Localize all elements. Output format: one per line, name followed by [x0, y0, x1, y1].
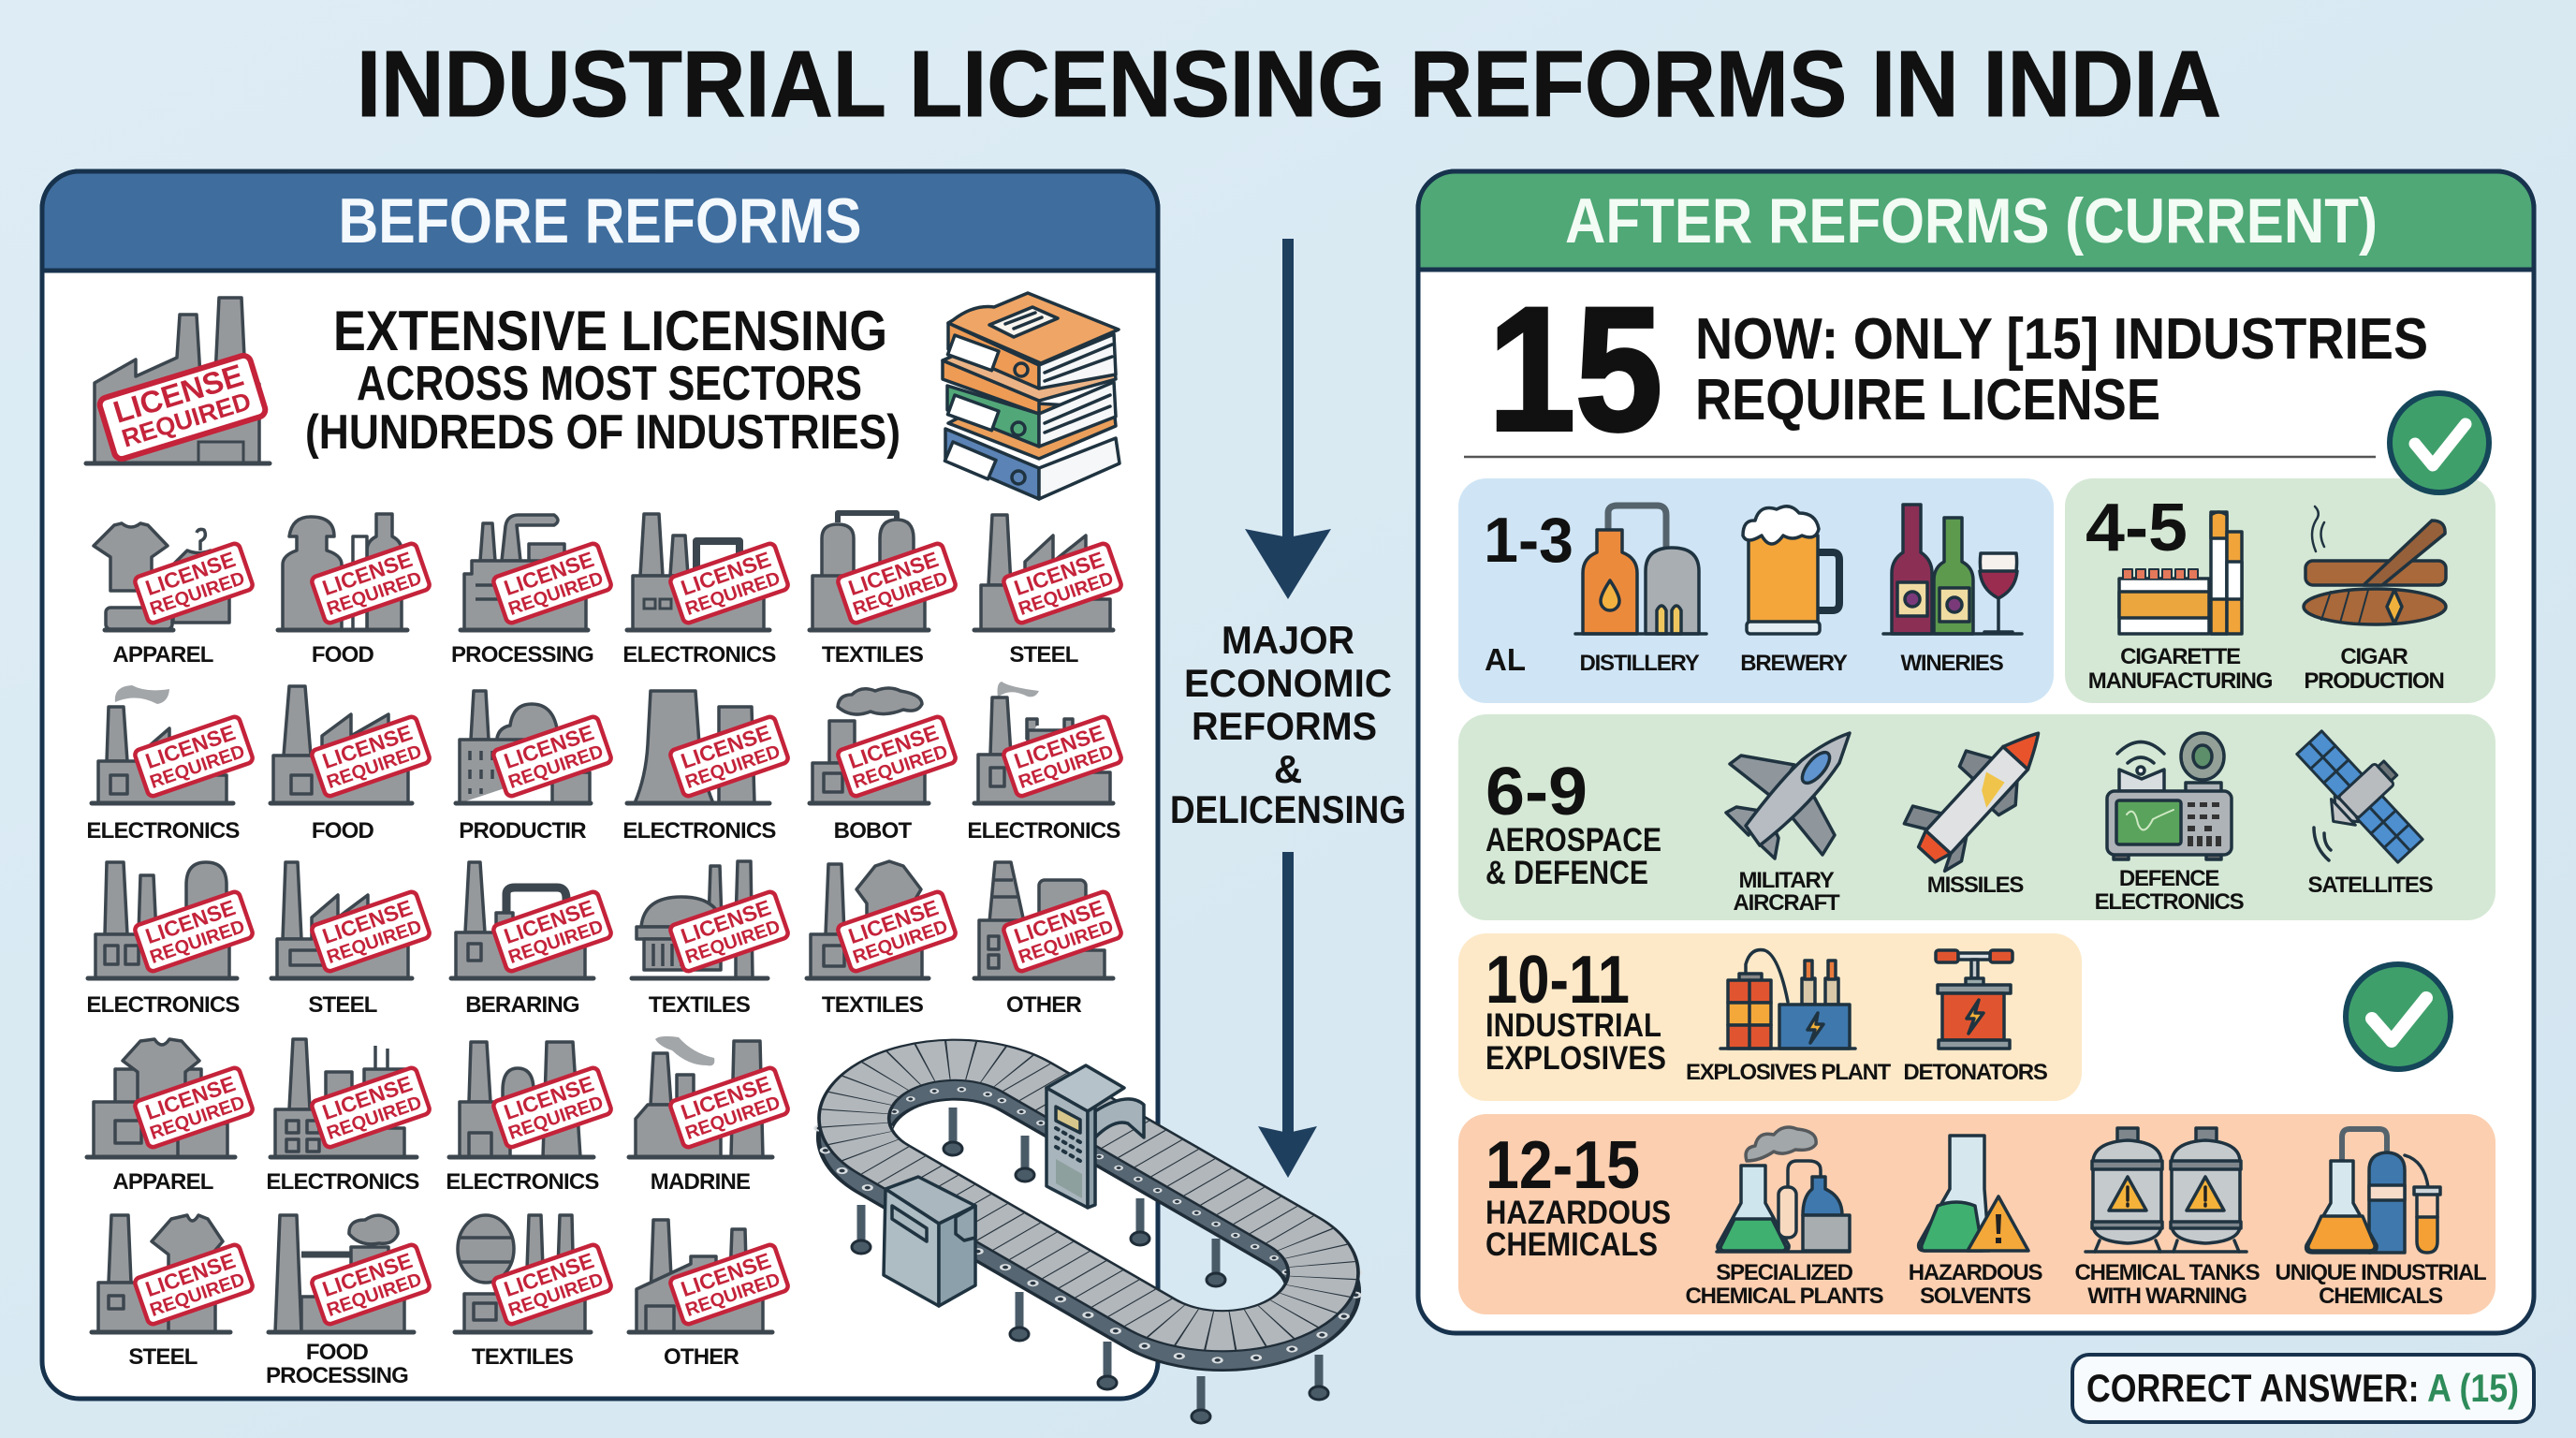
label: cigar production [2304, 644, 2444, 694]
label: detonators: DETONATORS [1903, 1060, 2048, 1085]
label: cigar production: PRODUCTION [2304, 668, 2444, 694]
panel header: after reforms: AFTER REFORMS (CURRENT) [1565, 185, 2378, 257]
grid cell: madrine: LICENSE [678, 1071, 774, 1124]
label: MADRINE [651, 1169, 751, 1195]
label: ELECTRONICS [967, 818, 1120, 844]
grid cell: food processing: REQUIRED [324, 1269, 424, 1321]
centre label: major economic reforms: MAJOR [1222, 618, 1354, 662]
grid cell: berarng: REQUIRED [505, 917, 606, 968]
card: industrial explosives 10-11: 10-11 [1486, 943, 1630, 1018]
card: alcohol 1-3 [1458, 478, 2054, 703]
grid cell: productir [456, 691, 612, 844]
grid cell: textiles sphere [455, 1215, 612, 1370]
label: hazardous solvents [1909, 1260, 2042, 1309]
grid cell: food row 2 [271, 686, 431, 844]
icon: wineries [1883, 505, 2022, 634]
card: hazardous chemicals 12-15 [1458, 1114, 2496, 1314]
label: wineries: WINERIES [1900, 651, 2004, 676]
icon: cigars [2304, 506, 2446, 624]
answer box: CORRECT ANSWER: A (15) [2086, 1366, 2519, 1410]
grid cell: productir: LICENSE [501, 720, 597, 773]
label: OTHER [1006, 992, 1081, 1018]
centre label: major economic reforms [1170, 618, 1406, 831]
big number 15: 15 [1488, 271, 1662, 467]
label: military aircraft: MILITARY [1738, 868, 1835, 893]
grid cell: steel row 3: LICENSE [319, 895, 416, 948]
grid cell: apparel: LICENSE [142, 547, 239, 600]
centre label: major economic reforms: REFORMS [1192, 704, 1377, 748]
card: alcohol 1-3: AL [1485, 642, 1526, 677]
label: TEXTILES [822, 642, 924, 668]
panel header: before reforms [42, 171, 1158, 271]
label: satellites: SATELLITES [2308, 873, 2434, 898]
grid cell: steel row 3: REQUIRED [324, 917, 424, 968]
grid cell: electronics [622, 514, 789, 668]
grid cell: food processing: LICENSE [319, 1248, 416, 1301]
subheading: extensive licensing: EXTENSIVE LICENSING [333, 300, 887, 362]
grid cell: bobot: REQUIRED [850, 741, 950, 793]
grid cell: processing: LICENSE [501, 547, 597, 600]
icon: satellite [2283, 714, 2441, 875]
card: tobacco 4-5: 4-5 [2086, 491, 2188, 565]
grid cell: bobot [810, 688, 957, 844]
grid cell: electronics: REQUIRED [682, 568, 783, 620]
grid cell: other: LICENSE [1011, 895, 1107, 948]
grid cell: other: REQUIRED [1016, 917, 1116, 968]
grid cell: food row 2: LICENSE [319, 720, 416, 773]
check badge top [2390, 393, 2489, 492]
headline: only 15 industries [1695, 307, 2428, 433]
label: defence electronics: ELECTRONICS [2095, 889, 2245, 915]
panel: before reforms [42, 171, 1158, 1399]
icon: large factory with license stamp: REQUIRED [119, 387, 255, 453]
grid cell: electronics row 2: REQUIRED [147, 741, 247, 793]
icon: detonator [1936, 950, 2012, 1049]
label: TEXTILES [649, 992, 751, 1018]
label: military aircraft: AIRCRAFT [1733, 890, 1840, 916]
grid cell: textiles shirt: LICENSE [845, 895, 942, 948]
label: PROCESSING [451, 642, 593, 668]
card: industrial explosives 10-11 [1458, 933, 2082, 1101]
label: cigarette manufacturing: CIGARETTE [2120, 644, 2241, 669]
label: ELECTRONICS [446, 1169, 599, 1195]
grid cell: electronics row 4 [266, 1039, 431, 1195]
label: BERARING [465, 992, 579, 1018]
grid cell: processing [451, 515, 612, 668]
subheading: extensive licensing: ACROSS MOST SECTORS [357, 357, 862, 411]
label: specialized chemical plants [1686, 1260, 1884, 1309]
grid cell: textiles [810, 513, 957, 668]
label: chemical tanks with warning [2075, 1260, 2261, 1309]
label: ELECTRONICS [266, 1169, 419, 1195]
scanner machine on belt [1046, 1065, 1144, 1208]
grid cell: berarng: LICENSE [501, 895, 597, 948]
grid cell: textiles sphere: LICENSE [501, 1248, 597, 1301]
grid cell: other row 5: REQUIRED [682, 1269, 783, 1321]
card: industrial explosives 10-11: EXPLOSIVES [1486, 1040, 1666, 1077]
label: hazardous solvents: HAZARDOUS [1909, 1260, 2042, 1285]
panel header: after reforms [1418, 171, 2534, 270]
headline: only 15 industries: REQUIRE LICENSE [1695, 368, 2160, 433]
grid cell: electronics with smoke: LICENSE [1011, 720, 1107, 773]
grid cell: apparel [94, 523, 254, 668]
grid cell: electronics tanks: REQUIRED [505, 1093, 606, 1144]
icon: brewery [1743, 506, 1839, 634]
grid cell: steel [974, 515, 1122, 668]
grid cell: textiles dome [632, 861, 789, 1018]
centre label: major economic reforms: & [1274, 747, 1302, 791]
icon: unique industrial chemicals [2306, 1129, 2440, 1253]
grid cell: apparel row 4 [87, 1039, 254, 1195]
label: PRODUCTIR [459, 818, 586, 844]
label: unique industrial chemicals [2276, 1260, 2486, 1309]
subheading: extensive licensing: (HUNDREDS OF INDUSTRIES) [305, 405, 900, 460]
icon: distillery [1575, 506, 1706, 634]
card: hazardous chemicals 12-15: HAZARDOUS [1486, 1195, 1671, 1231]
grid cell: textiles shirt: REQUIRED [850, 917, 950, 968]
label: APPAREL [112, 1169, 213, 1195]
grid cell: madrine: REQUIRED [682, 1093, 783, 1144]
grid cell: apparel: REQUIRED [147, 568, 247, 620]
icon: specialized chemical plants [1717, 1127, 1850, 1252]
label: BOBOT [834, 818, 912, 844]
card: aerospace and defence 6-9: AEROSPACE [1486, 822, 1661, 858]
grid cell: electronics row 3: LICENSE [142, 895, 239, 948]
panel header: before reforms: BEFORE REFORMS [339, 185, 861, 257]
label: FOOD [306, 1340, 369, 1365]
grid cell: textiles sphere: REQUIRED [505, 1269, 606, 1321]
grid cell: food row 2: REQUIRED [324, 741, 424, 793]
grid cell: cooling tower: REQUIRED [682, 741, 783, 793]
label: distillery: DISTILLERY [1579, 651, 1700, 676]
grid cell: electronics tanks [446, 1042, 612, 1195]
grid cell: other row 5: LICENSE [678, 1248, 774, 1301]
grid cell: bobot: LICENSE [845, 720, 942, 773]
grid cell: productir: REQUIRED [505, 741, 606, 793]
grid cell: food: LICENSE [319, 547, 416, 600]
label: chemical tanks with warning: WITH WARNING [2087, 1284, 2247, 1309]
label: brewery: BREWERY [1740, 651, 1848, 676]
grid cell: apparel row 4: LICENSE [142, 1071, 239, 1124]
icon: missile [1895, 704, 2062, 876]
card: hazardous chemicals 12-15: CHEMICALS [1486, 1226, 1658, 1263]
grid cell: berarng [451, 862, 612, 1018]
subheading: extensive licensing [305, 300, 900, 460]
grid cell: electronics: LICENSE [678, 547, 774, 600]
grid cell: textiles: LICENSE [845, 547, 942, 600]
grid cell: electronics with smoke: REQUIRED [1016, 741, 1116, 793]
arrow: bottom [1258, 852, 1317, 1178]
grid cell: food [278, 514, 431, 668]
icon: cigarette pack [2119, 512, 2242, 634]
card: alcohol 1-3: 1-3 [1484, 505, 1573, 576]
label: unique industrial chemicals: CHEMICALS [2319, 1284, 2443, 1309]
label: OTHER [664, 1344, 739, 1370]
grid cell: other [974, 862, 1122, 1018]
icon: explosives plant [1720, 950, 1855, 1049]
grid cell: food processing [266, 1215, 431, 1388]
label: defence electronics: DEFENCE [2119, 866, 2219, 891]
grid cell: steel row 5: REQUIRED [147, 1269, 247, 1321]
label: ELECTRONICS [622, 642, 776, 668]
label: unique industrial chemicals: UNIQUE INDUSTRIAL [2276, 1260, 2486, 1285]
headline: only 15 industries: NOW: ONLY [15] INDUSTRIES [1695, 307, 2428, 372]
grid cell: electronics row 3 [86, 862, 254, 1018]
label: ELECTRONICS [622, 818, 776, 844]
label: cigarette manufacturing: MANUFACTURING [2088, 668, 2273, 694]
icon: large factory with license stamp: LICENSE [110, 358, 247, 430]
label: defence electronics [2095, 866, 2245, 915]
label: STEEL [1009, 642, 1078, 668]
grid cell: steel: LICENSE [1011, 547, 1107, 600]
label: FOOD [312, 642, 374, 668]
answer box [2072, 1355, 2534, 1422]
label: FOOD [312, 818, 374, 844]
grid cell: electronics row 2: LICENSE [142, 720, 239, 773]
grid cell: electronics row 4: LICENSE [319, 1071, 416, 1124]
grid cell: food: REQUIRED [324, 568, 424, 620]
label: cigarette manufacturing [2088, 644, 2273, 694]
grid cell: steel row 5 [92, 1215, 254, 1370]
icon: hazardous solvents [1919, 1136, 2028, 1251]
grid cell: electronics with smoke [967, 682, 1122, 844]
grid cell: textiles dome: REQUIRED [682, 917, 783, 968]
panel: after reforms [1418, 171, 2534, 1333]
label: PROCESSING [266, 1363, 408, 1388]
grid cell: textiles shirt [807, 861, 957, 1018]
icon: large factory with license stamp [86, 298, 270, 463]
card: industrial explosives 10-11: INDUSTRIAL [1486, 1007, 1661, 1044]
card: aerospace and defence 6-9 [1458, 704, 2496, 920]
label [266, 1340, 408, 1388]
label: military aircraft [1733, 868, 1840, 916]
label: TEXTILES [472, 1344, 574, 1370]
label: APPAREL [112, 642, 213, 668]
label: STEEL [308, 992, 377, 1018]
grid cell: electronics tanks: LICENSE [501, 1071, 597, 1124]
grid cell: other row 5 [629, 1220, 789, 1370]
label: specialized chemical plants: CHEMICAL PLANTS [1686, 1284, 1884, 1309]
label: STEEL [128, 1344, 198, 1370]
grid cell: textiles dome: LICENSE [678, 895, 774, 948]
grid cell: steel row 3 [271, 862, 431, 1018]
card: aerospace and defence 6-9: 6-9 [1486, 755, 1588, 829]
centre label: major economic reforms: ECONOMIC [1184, 661, 1392, 705]
grid cell: steel row 5: LICENSE [142, 1248, 239, 1301]
label: ELECTRONICS [86, 992, 240, 1018]
grid cell: cooling tower: LICENSE [678, 720, 774, 773]
grid cell: steel: REQUIRED [1016, 568, 1116, 620]
grid cell: cooling tower [622, 691, 789, 844]
label: ELECTRONICS [86, 818, 240, 844]
label: TEXTILES [822, 992, 924, 1018]
label: hazardous solvents: SOLVENTS [1920, 1284, 2031, 1309]
grid cell: processing: REQUIRED [505, 568, 606, 620]
label: chemical tanks with warning: CHEMICAL TANKS [2075, 1260, 2261, 1285]
title: INDUSTRIAL LICENSING REFORMS IN INDIA [357, 32, 2221, 137]
grid cell: electronics row 4: REQUIRED [324, 1093, 424, 1144]
label: missiles: MISSILES [1927, 873, 2024, 898]
grid cell: electronics row 2 [86, 685, 254, 844]
icon: stack of binders [943, 293, 1120, 499]
card: tobacco 4-5 [2065, 478, 2496, 703]
conveyor belt illustration [764, 1017, 1413, 1423]
icon: military aircraft [1726, 733, 1850, 858]
icon: defence electronics [2107, 733, 2232, 859]
card: aerospace and defence 6-9: & DEFENCE [1486, 855, 1648, 891]
check badge middle [2346, 964, 2451, 1069]
grid cell: textiles: REQUIRED [850, 568, 950, 620]
label: explosives plant: EXPLOSIVES PLANT [1686, 1060, 1892, 1085]
label: cigar production: CIGAR [2340, 644, 2408, 669]
card: hazardous chemicals 12-15: 12-15 [1486, 1128, 1640, 1203]
grid cell: apparel row 4: REQUIRED [147, 1093, 247, 1144]
centre label: major economic reforms: DELICENSING [1170, 787, 1406, 831]
icon: chemical tanks with warning [2086, 1128, 2247, 1252]
grid cell: madrine [629, 1036, 789, 1195]
control cabinet on belt [884, 1177, 975, 1306]
label: specialized chemical plants: SPECIALIZED [1716, 1260, 1853, 1285]
grid cell: electronics row 3: REQUIRED [147, 917, 247, 968]
arrow: top [1245, 239, 1331, 599]
